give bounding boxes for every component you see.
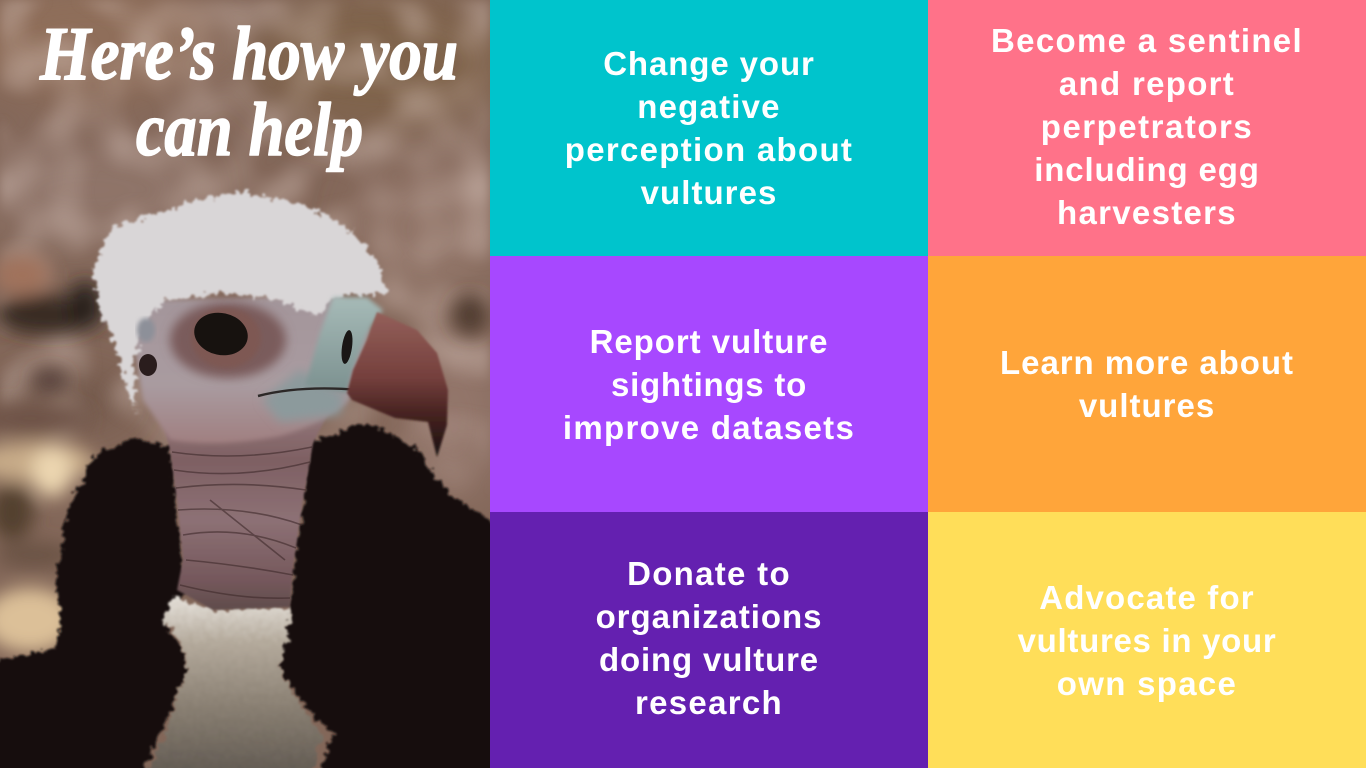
panel: learn more: Learn more about [1000,344,1294,381]
beak [347,312,448,457]
ear hole [139,354,157,376]
panel: become a sentinel: and report [1059,64,1235,102]
panel: become a sentinel: Become a sentinel [991,22,1303,58]
panel: become a sentinel: including egg [1034,150,1260,188]
eye [190,308,252,360]
gape line [258,388,360,396]
panel: change perception: perception about [565,131,853,168]
title: can help [136,88,363,172]
wrinkled neck [160,410,330,610]
cere [305,297,383,393]
panel: become a sentinel: perpetrators [1041,108,1253,144]
panel: learn more: vultures [1079,387,1215,424]
panel: advocate: Advocate for [1039,578,1255,616]
blue-grey lower cheek [262,370,345,422]
white chest [145,597,322,768]
panel: change perception: vultures [641,174,777,211]
nostril [340,329,354,365]
panel: donate: research [635,684,783,721]
panel: donate: Donate to [627,555,791,592]
panel: advocate: own space [1057,664,1237,702]
panel: change perception [490,0,928,256]
panel: learn more [928,256,1366,512]
panel: vulture photo [0,0,490,768]
face skin [131,296,370,443]
panel: advocate [928,512,1366,768]
panel: become a sentinel [928,0,1366,256]
panel: report sightings [490,256,928,512]
grey-blue patch [137,318,155,342]
panel: report sightings: sightings to [611,366,807,402]
panel: report sightings: improve datasets [563,408,855,446]
panel: donate: doing vulture [599,641,819,678]
panel: change perception: negative [637,88,781,125]
panel: report sightings: Report vulture [590,322,828,360]
title [38,12,458,172]
panel: advocate: vultures in your [1018,622,1276,658]
body black feathers [0,423,500,768]
panel: donate: organizations [596,598,822,635]
white head fluff [93,192,387,425]
blurred background [0,0,510,768]
eye surround [170,302,286,378]
panel: change perception: Change your [603,45,815,82]
panel: donate [490,512,928,768]
panel: become a sentinel: harvesters [1057,194,1237,230]
